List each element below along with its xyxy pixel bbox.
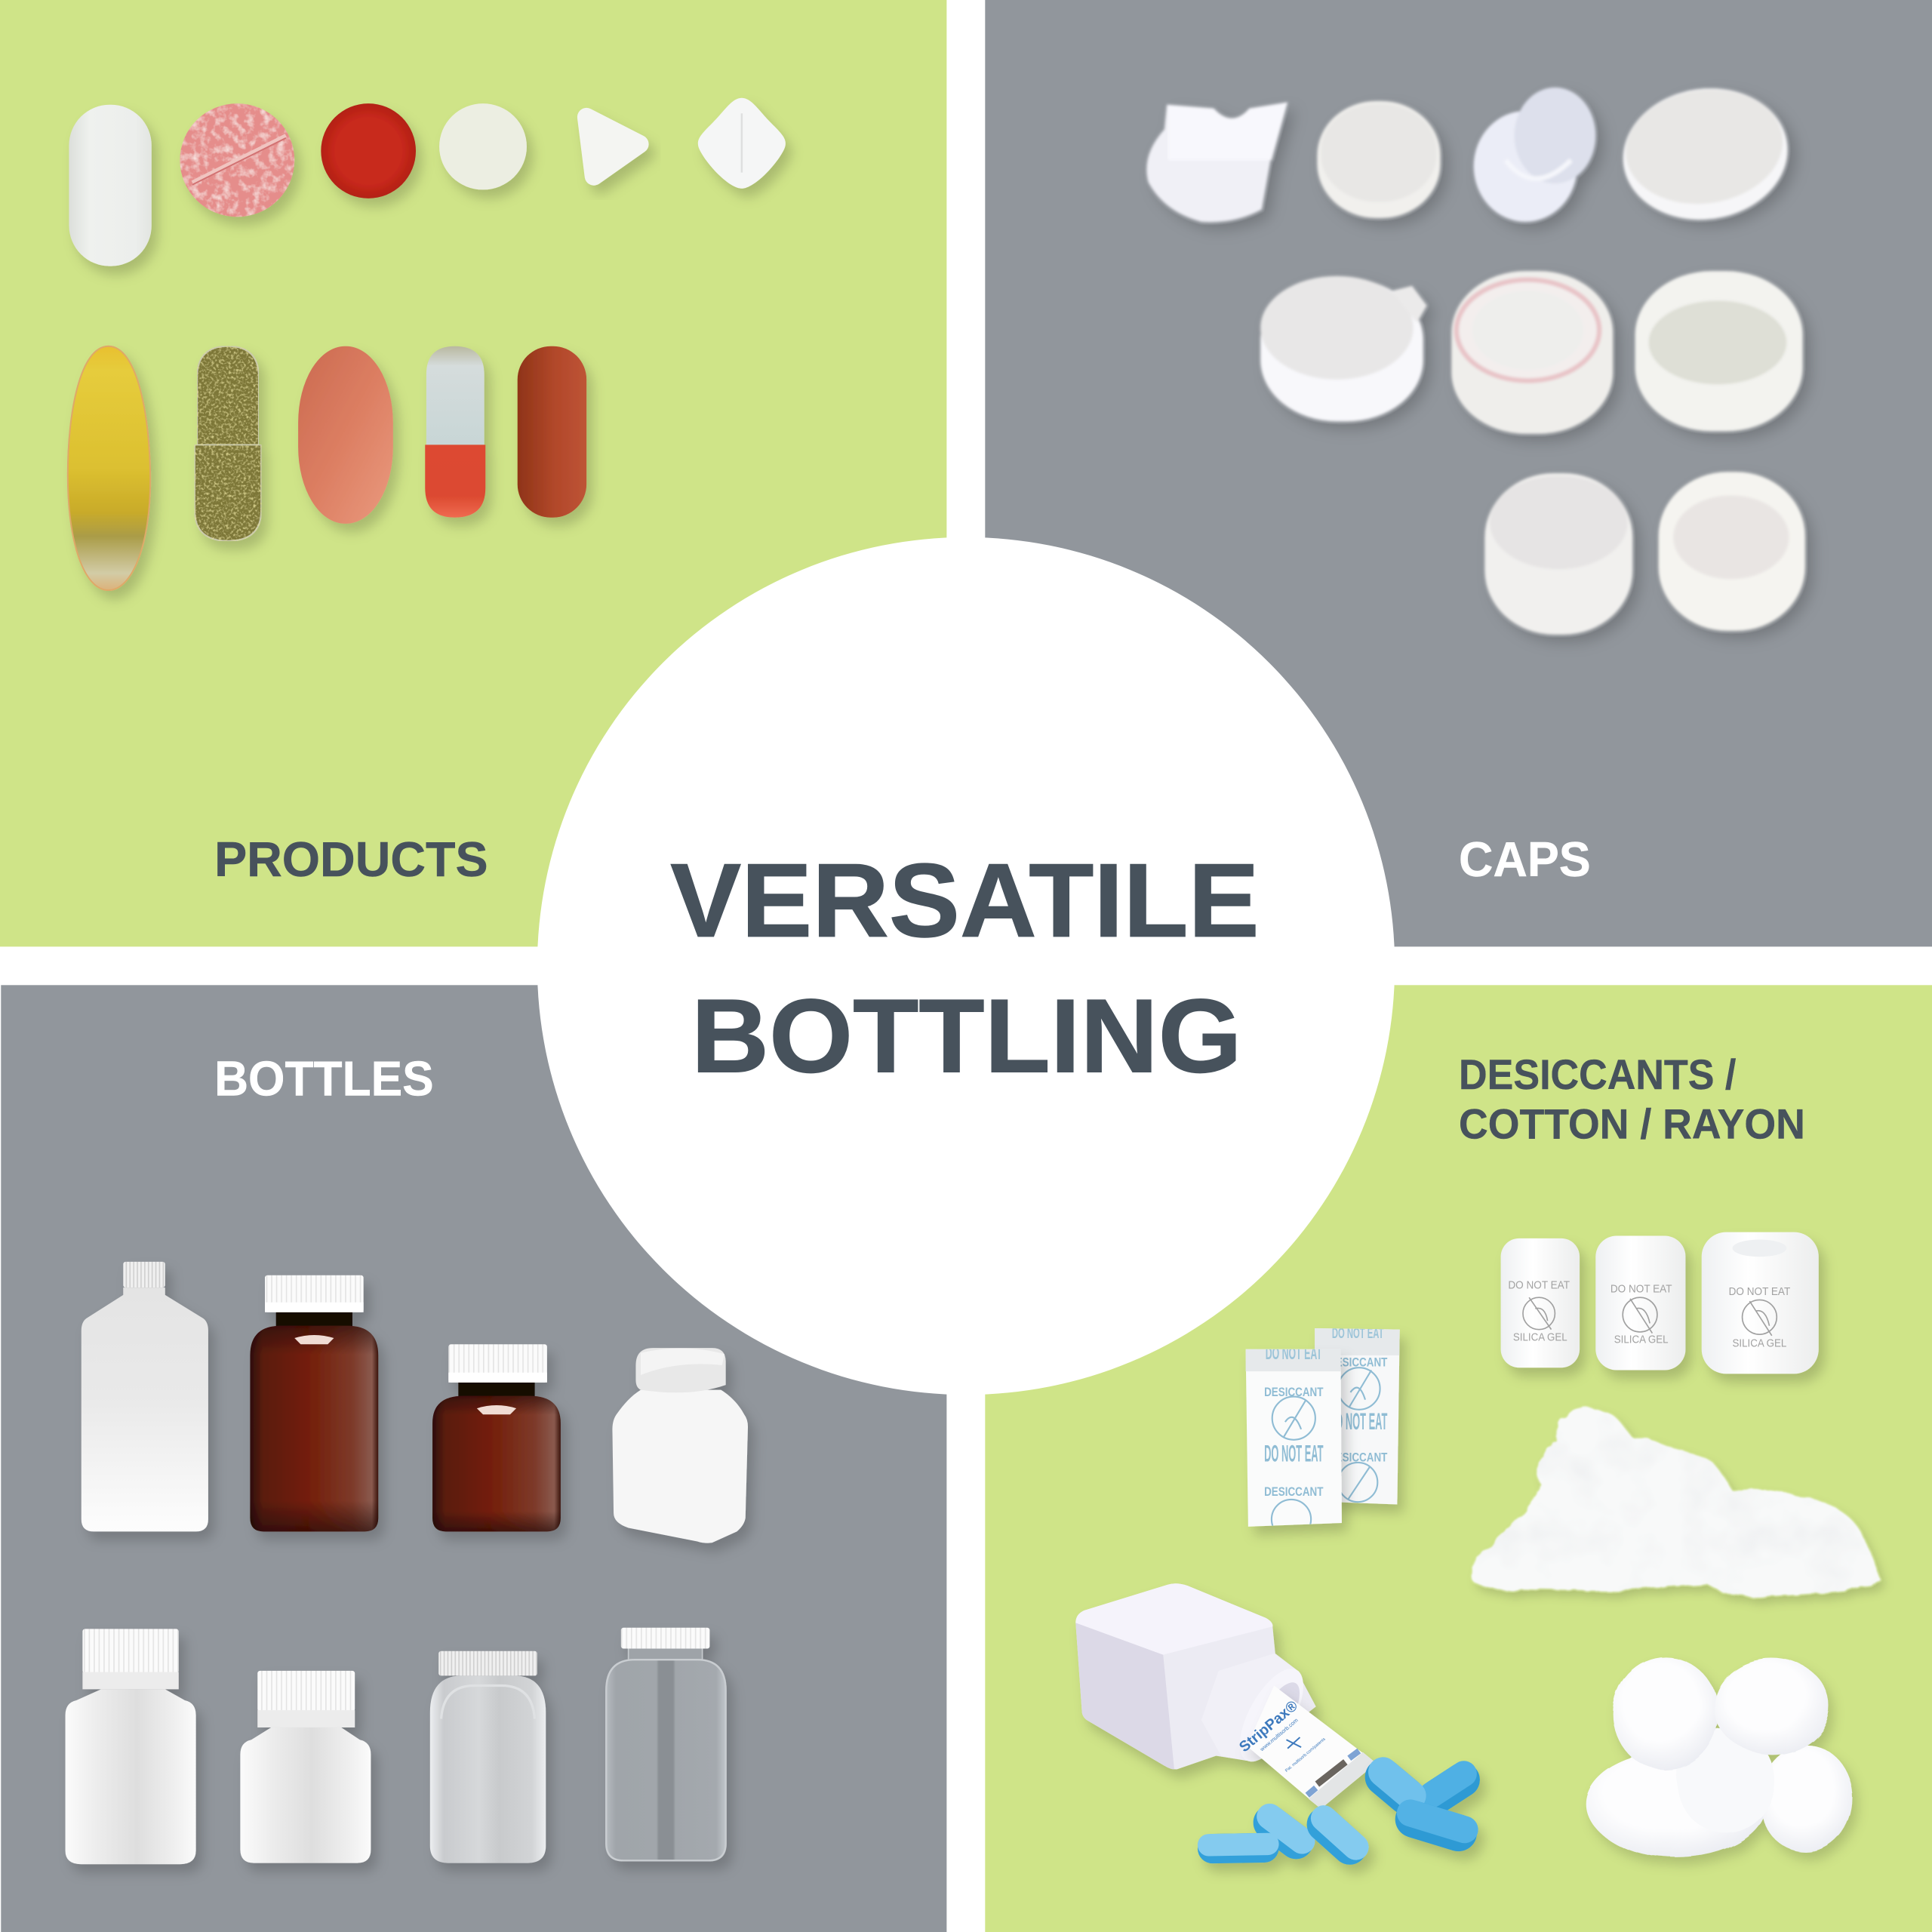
cap with pink seal ring bbox=[1451, 271, 1613, 434]
tipped white bottle bbox=[1075, 1583, 1316, 1771]
label: caps: CAPS bbox=[1459, 832, 1591, 887]
white square shoulder bottle bbox=[82, 1262, 208, 1531]
red round tablet bbox=[321, 103, 416, 198]
yellow softgel bbox=[68, 346, 150, 590]
pink scored tablet bbox=[180, 103, 294, 217]
back packet: DESICCANT bbox=[1328, 1356, 1387, 1370]
panel: caps bbox=[985, 0, 1932, 946]
canister three: DO NOT EAT bbox=[1729, 1286, 1790, 1298]
front packet: DO NOT EAT bbox=[1266, 1343, 1322, 1363]
spilled bottle with strip pack bbox=[1075, 1583, 1487, 1872]
blue tablets bbox=[1198, 1751, 1487, 1872]
StripPax desiccant strip: Pat. multisorb.com/patents bbox=[1284, 1737, 1327, 1774]
tablet six bbox=[1391, 1796, 1481, 1856]
cap row one bbox=[1146, 78, 1796, 230]
white oblong tablet bbox=[69, 105, 152, 266]
front packet: DESICCANT bbox=[1264, 1485, 1323, 1499]
label: products: PRODUCTS bbox=[214, 832, 488, 887]
cap row three bbox=[1484, 472, 1805, 635]
StripPax desiccant strip: www.multisorb.com bbox=[1258, 1717, 1300, 1753]
front packet: DESICCANT bbox=[1264, 1386, 1323, 1399]
panel: products bbox=[0, 0, 946, 946]
two-tone capsule bbox=[425, 346, 485, 518]
title: BOTTLING bbox=[691, 977, 1242, 1094]
translucent flip cap bbox=[1474, 88, 1595, 222]
small white bottle bbox=[240, 1671, 371, 1863]
notched white cap bbox=[1146, 103, 1287, 222]
silica gel canisters bbox=[1501, 1232, 1819, 1374]
round cap with liner bbox=[1659, 472, 1805, 631]
canister three: SILICA GEL bbox=[1733, 1337, 1786, 1349]
panel: desiccants cotton rayon bbox=[985, 985, 1932, 1932]
small amber bottle bbox=[432, 1344, 561, 1531]
panel: bottles bbox=[1, 985, 946, 1932]
front packet: DO NOT EAT bbox=[1264, 1440, 1323, 1466]
back packet: DO NOT EAT bbox=[1328, 1408, 1387, 1435]
rayon fibre cloud bbox=[1469, 1408, 1880, 1597]
back packet: DO NOT EAT bbox=[1332, 1325, 1383, 1342]
clear glass bottle bbox=[606, 1628, 726, 1860]
brown oblong tablet bbox=[518, 346, 586, 518]
canister two: SILICA GEL bbox=[1614, 1334, 1669, 1346]
large white bottle bbox=[66, 1629, 196, 1864]
StripPax desiccant strip: StripPax® bbox=[1236, 1697, 1301, 1755]
white triangular tablet bbox=[586, 117, 639, 176]
canister two: DO NOT EAT bbox=[1611, 1284, 1672, 1296]
canister three bbox=[1702, 1232, 1819, 1374]
wide white cap bbox=[1614, 78, 1796, 230]
canister one: DO NOT EAT bbox=[1508, 1280, 1570, 1292]
label: desiccants cotton rayon: DESICCANTS / bbox=[1459, 1051, 1736, 1098]
center circle bbox=[537, 537, 1395, 1395]
StripPax desiccant strip bbox=[1236, 1685, 1377, 1809]
tablet five bbox=[1414, 1756, 1487, 1820]
front packet bbox=[1246, 1343, 1342, 1539]
herb powder capsule bbox=[195, 346, 261, 541]
tablet three bbox=[1300, 1800, 1374, 1872]
title: VERSATILE bbox=[670, 842, 1260, 959]
open cup cap bbox=[1635, 271, 1803, 431]
back packet bbox=[1315, 1325, 1400, 1504]
bottle row two bbox=[66, 1628, 726, 1864]
cap row two bbox=[1260, 271, 1803, 434]
hinged white cap bbox=[1260, 276, 1427, 421]
tall amber bottle bbox=[250, 1275, 378, 1531]
label: desiccants cotton rayon: COTTON / RAYON bbox=[1459, 1101, 1805, 1148]
salmon oval tablet bbox=[298, 346, 393, 524]
frosted translucent bottle bbox=[430, 1651, 546, 1863]
label: bottles: BOTTLES bbox=[214, 1051, 434, 1106]
plain white cap bbox=[1317, 101, 1441, 218]
round cap side view bbox=[1484, 473, 1632, 635]
canister one: SILICA GEL bbox=[1513, 1331, 1567, 1343]
white flip-top bottle bbox=[612, 1348, 748, 1543]
off-white round tablet bbox=[439, 103, 527, 189]
canister two bbox=[1595, 1236, 1685, 1371]
bottle row one bbox=[82, 1262, 748, 1543]
row two capsules bbox=[68, 346, 586, 590]
cotton balls bbox=[1586, 1657, 1854, 1857]
tablet four bbox=[1358, 1751, 1432, 1822]
row one tablets bbox=[69, 98, 786, 266]
canister one bbox=[1501, 1238, 1580, 1367]
tablet one bbox=[1198, 1832, 1279, 1864]
tablet two bbox=[1246, 1798, 1320, 1866]
desiccant packets bbox=[1246, 1325, 1400, 1539]
white diamond tablet bbox=[698, 98, 786, 189]
back packet: DESICCANT bbox=[1328, 1451, 1387, 1464]
